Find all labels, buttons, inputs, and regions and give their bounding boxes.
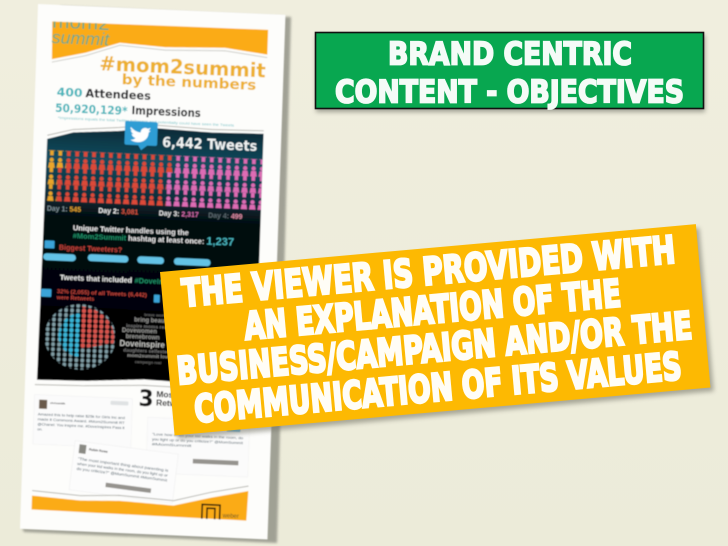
hashtag word cloud: mom2summit love <box>127 353 171 361</box>
tweet card two: #MomSummit <box>152 442 193 448</box>
unique handles statement <box>72 223 234 249</box>
stats: attendees and impressions: *Impressions equals the total Twitter followers and potentially could have seen the Tweets <box>58 116 234 128</box>
most retweeted heading <box>138 387 199 415</box>
icon: second twitter square <box>154 295 160 303</box>
follower avatars <box>105 483 151 493</box>
torn edge <box>52 42 267 71</box>
hashtag word cloud: inspire moms real <box>126 323 169 331</box>
retweet share text: were Retweets <box>56 295 94 303</box>
logo: mom2 summit <box>51 20 110 46</box>
callout shadow <box>163 228 714 439</box>
tweet card three: Robin Rowe <box>89 447 108 454</box>
heading box fill <box>316 32 704 108</box>
tweet card three: do you criticize?" @MomSummit #MomSummit <box>76 467 168 483</box>
tweet card two <box>146 417 250 477</box>
hashtag word cloud: Dovewomen <box>122 328 157 335</box>
poster paper <box>20 4 285 539</box>
tweet card one: on. <box>37 427 43 432</box>
bottom orange banner <box>31 477 248 521</box>
yellow objective callout <box>160 224 714 439</box>
tweet card one <box>33 394 133 448</box>
most retweeted heading: 3 <box>138 387 154 413</box>
heading: #mom2summit by the numbers: #mom2summit <box>99 52 267 82</box>
heading box shadow <box>316 35 705 112</box>
tweets that included hashtag <box>60 273 185 287</box>
heading: #mom2summit by the numbers: by the numbers <box>121 72 257 94</box>
unique handles statement: 1,237 <box>206 235 234 249</box>
torn edge below panel <box>35 379 255 394</box>
objective heading box <box>316 32 705 112</box>
hashtag word cloud: bring beauty <box>134 317 171 325</box>
tweet card one: chrissmith <box>50 401 65 406</box>
avatar <box>39 400 47 409</box>
tweet card three: when your kid walks in the room, do you light up or <box>77 462 169 478</box>
follower avatars <box>193 459 238 465</box>
hashtag word cloud: campaign real <box>135 359 161 365</box>
heading text: BRAND CENTRIC <box>388 36 632 72</box>
daily tweet counts: Day 1: 545 <box>47 206 81 214</box>
daily tweet counts: Day 4: 499 <box>208 213 243 221</box>
tweet card one: Amazed this to help raise $25k for Girls Inc and <box>38 412 125 420</box>
stats: attendees and impressions <box>55 85 236 128</box>
tweet card one: made it Commons Award. #Mom2Summit RT <box>38 417 126 425</box>
tweet card one: @Chanel: You inspire me. #DoveInspires Pass it <box>37 422 126 430</box>
logo: mom2 summit: mom2 <box>52 10 110 35</box>
unique handles statement: hashtag at least once: <box>128 233 205 246</box>
stats: attendees and impressions: Attendees <box>85 86 151 103</box>
infographic poster <box>20 4 285 539</box>
retweet share text: 32% (2,055) of all Tweets (6,442) <box>57 289 147 299</box>
icon: twitter square <box>41 289 52 297</box>
hashtag word cloud: brenebrown <box>126 334 160 341</box>
tweet card three: "The most important thing about parenting is <box>78 457 169 473</box>
tweets that included hashtag: Tweets that included <box>60 273 133 285</box>
people pictogram rows <box>46 150 263 210</box>
tweets that included hashtag: #DoveInspires <box>134 276 185 287</box>
paper shadow <box>22 6 291 543</box>
heading text: CONTENT - OBJECTIVES <box>335 74 684 110</box>
hashtag word cloud: daughters selfesteem <box>123 348 175 356</box>
icon: small twitter square <box>44 240 55 249</box>
callout fill <box>160 224 710 435</box>
callout text <box>168 227 697 433</box>
most retweeted heading: Retweeted <box>156 398 198 410</box>
torn edge above panel <box>47 120 264 145</box>
retweet share text <box>56 289 147 305</box>
heading text <box>335 36 684 110</box>
tweet card three <box>69 441 178 503</box>
daily tweet counts: Day 2: 3,081 <box>98 208 139 217</box>
daily tweet counts <box>47 206 243 221</box>
top orange banner <box>51 20 268 71</box>
tweet card two: you light up or do you criticize?" @MomSummit <box>152 437 244 445</box>
tweet total: 6,442 Tweets <box>162 135 257 155</box>
biggest tweeters label: Biggest Tweeters? <box>59 245 122 255</box>
handle pills <box>43 252 211 267</box>
logo: weber <box>202 504 239 520</box>
stats: attendees and impressions: 50,920,129* <box>55 101 128 118</box>
biggest tweeters <box>43 240 211 267</box>
logo: weber: weber <box>222 514 239 520</box>
avatar <box>79 444 87 454</box>
unique handles statement: Unique Twitter handles using the <box>73 223 189 237</box>
stats: attendees and impressions: 400 <box>57 85 83 100</box>
hashtag word cloud: brave women <box>144 312 170 318</box>
retweet stat <box>41 289 160 306</box>
unique handles statement: #Mom2Summit <box>73 231 127 242</box>
stats: attendees and impressions: Impressions <box>131 103 201 120</box>
daily tweet counts: Day 3: 2,317 <box>159 210 199 219</box>
hashtag word cloud <box>119 311 176 366</box>
hashtag word cloud: Doveinspire <box>119 339 166 350</box>
logo: mom2 summit: summit <box>51 27 111 50</box>
black data panel <box>37 123 264 389</box>
most retweeted heading: Most <box>156 389 176 400</box>
tweet card two: "Love how when your kid walks in the room, do <box>152 432 243 440</box>
icon: twitter bubble <box>124 121 158 151</box>
retweet dot sphere chart <box>43 303 117 371</box>
